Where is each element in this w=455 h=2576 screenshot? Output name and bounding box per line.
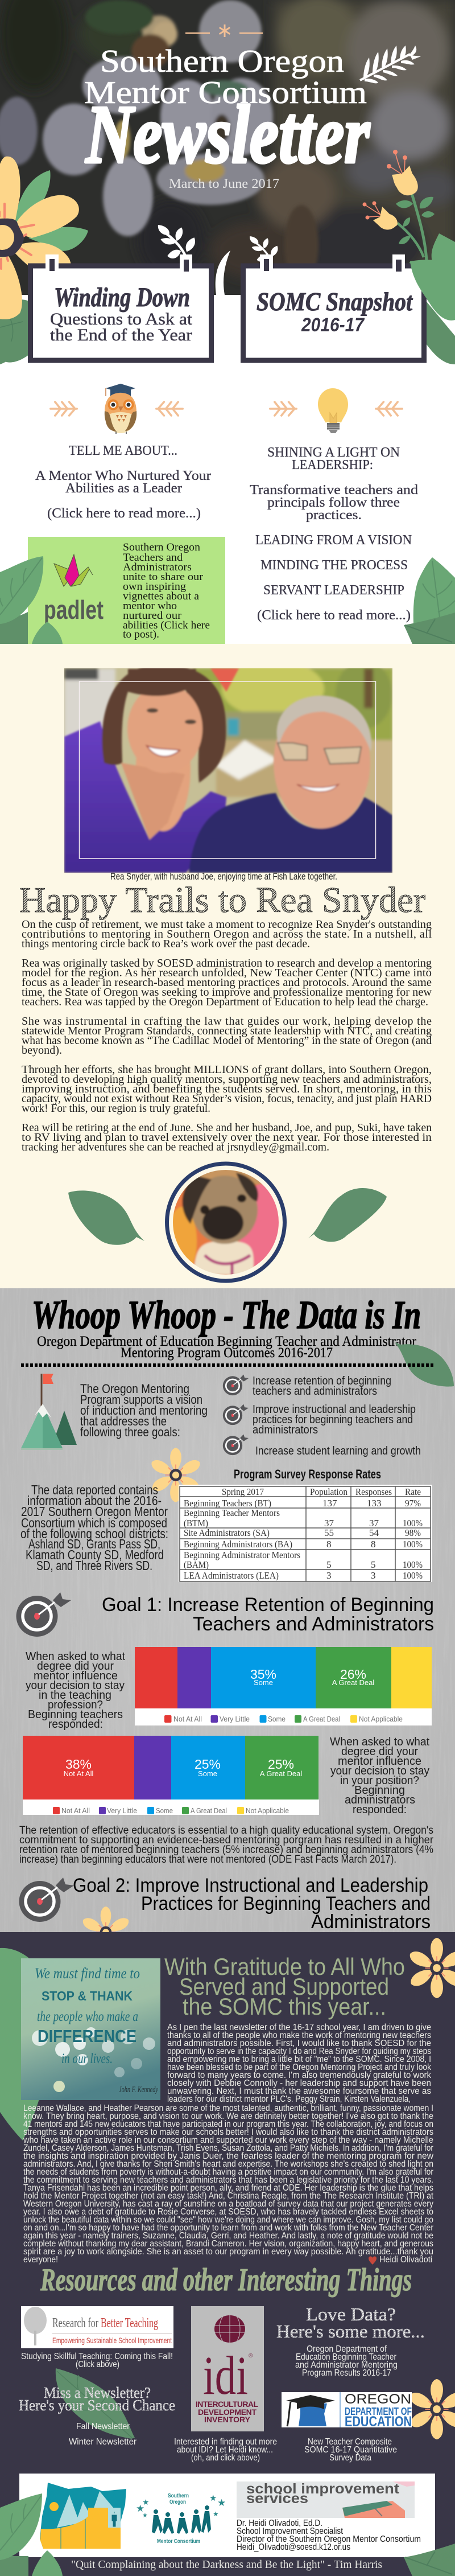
heading: Goal 2: Practices for Beginning Teachers and bbox=[141, 1893, 431, 1914]
heading: Miss a Newsletter: Here's your Second Chance bbox=[19, 2397, 175, 2414]
chart: teachers stacked bar: Not Applicable bbox=[359, 1715, 403, 1723]
text: padlet description: mentor who bbox=[123, 600, 177, 612]
text: Tell me about: A Mentor Who Nurtured Your bbox=[35, 469, 211, 483]
panel: hero photo of white flowers bbox=[0, 0, 455, 295]
logo: Southern Oregon Mentor Consortium: ★ bbox=[209, 2493, 217, 2503]
illustration: leaves left bbox=[0, 556, 63, 644]
logo: Southern Oregon Mentor Consortium bbox=[136, 2493, 226, 2545]
table: program survey response rates: 54 bbox=[369, 1527, 379, 1538]
chart: administrators stacked bar: 25% bbox=[268, 1757, 294, 1772]
table: program survey response rates: Spring 2017 bbox=[222, 1486, 264, 1497]
text: contact details: Director of the Southern Oregon Mentor Consortium bbox=[237, 2534, 421, 2544]
chart: teachers stacked bar bbox=[135, 1647, 432, 1725]
text block: Rea Snyder tribute: model for the region. As her research unfolded, New Teacher Center (NTC) came into bbox=[22, 967, 432, 979]
text: teacher survey question: in the teaching bbox=[39, 1689, 111, 1702]
chart: administrators stacked bar: A Great Deal bbox=[260, 1769, 302, 1778]
table: program survey response rates: Beginning Administrator Mentors bbox=[184, 1550, 300, 1560]
logo: Intercultural Development Inventory bbox=[191, 2306, 264, 2431]
text: consortium districts: 2017 Southern Oregon Mentor bbox=[21, 1504, 168, 1519]
text block: Rea Snyder tribute: teachers. Rea was tapped by the Oregon Department of Education to help lead the charge. bbox=[22, 996, 428, 1008]
text: consortium districts: Ashland SD, Grants Pass SD, bbox=[28, 1536, 160, 1551]
link: new teacher composite survey data: SOMC 16-17 Quantitative bbox=[304, 2445, 397, 2455]
logo: Southern Oregon Mentor Consortium: Oregon bbox=[169, 2499, 186, 2505]
text: padlet description: Teachers and bbox=[123, 552, 183, 564]
text: IDI invitation: (oh, and click above) bbox=[191, 2453, 260, 2463]
heading: Miss a Newsletter: Miss a Newsletter? bbox=[44, 2384, 151, 2401]
text: studying skillful teaching: (Click above) bbox=[76, 2360, 119, 2369]
text: Shining a light on leadership: Transformative teachers and bbox=[250, 483, 418, 498]
heading: With Gratitude: With Gratitude to All Who bbox=[164, 1953, 405, 1980]
text: Shining a light on leadership: LEADERSHIP: bbox=[292, 458, 373, 473]
heading: Love Data: Here's some more... bbox=[276, 2321, 425, 2341]
photo caption: Rea Snyder, with husband Joe, enjoying time at Fish Lake together. bbox=[110, 871, 337, 882]
heading: Love Data bbox=[276, 2304, 425, 2341]
text: consortium districts: The data reported contains bbox=[31, 1482, 158, 1497]
text: studying skillful teaching bbox=[21, 2352, 173, 2369]
text: administrator survey question: Beginning bbox=[354, 1784, 405, 1797]
text block: gratitude message bbox=[23, 2023, 434, 2265]
heading: SOMC Snapshot: SOMC Snapshot bbox=[257, 287, 413, 316]
icons: white sprigs bbox=[158, 225, 278, 295]
text: administrator survey question: in your position? bbox=[340, 1774, 419, 1787]
heading: Happy Trails to Rea Snyder: Happy Trails to Rea Snyder bbox=[19, 880, 425, 920]
text block: Rea Snyder tribute bbox=[22, 918, 432, 1153]
text: padlet description: Administrators bbox=[123, 561, 192, 573]
chart: teachers stacked bar: Some bbox=[254, 1678, 273, 1687]
text: administrator survey question: your decision to stay bbox=[330, 1765, 429, 1777]
title: Mentor Consortium bbox=[84, 75, 367, 110]
image: JFK gratitude quote: DIFFERENCE bbox=[38, 2026, 136, 2046]
illustration: tall leaf left of quote bbox=[0, 1948, 52, 2140]
text block: Rea Snyder tribute: On the cusp of retirement, we must take a moment to recognize Rea Snyder's outstanding bbox=[22, 918, 432, 931]
text: consortium districts: Klamath County SD, Medford bbox=[26, 1547, 164, 1562]
table: program survey response rates: 3 bbox=[371, 1570, 375, 1581]
image: JFK gratitude quote: John F. Kennedy bbox=[119, 2085, 158, 2094]
heading: With Gratitude: the SOMC this year... bbox=[183, 1993, 386, 2020]
chart: teachers stacked bar: A Great Deal bbox=[303, 1715, 340, 1723]
text block: Rea Snyder tribute: improving instruction, and benefiting the students served. In short, mentoring, in this bbox=[22, 1083, 432, 1095]
chart: administrators stacked bar: Not Applicable bbox=[246, 1806, 289, 1815]
link: ODE program results: Program Results 2016-17 bbox=[302, 2368, 391, 2378]
logo: Southern Oregon ESD map bbox=[39, 2482, 127, 2550]
table: program survey response rates: 133 bbox=[367, 1498, 381, 1509]
text block: Rea Snyder tribute: focus as a leader in research-based mentoring practices and protocols. Around the same bbox=[22, 976, 432, 989]
text: padlet description: to post). bbox=[123, 628, 159, 640]
text: contact details: School Improvement Specialist bbox=[237, 2526, 343, 2536]
text block: Rea Snyder tribute: tracking her adventures she can be reached at jrsnydley@gmail.com. bbox=[22, 1141, 329, 1153]
chart: teachers stacked bar: Some bbox=[268, 1715, 286, 1723]
illustration: flower in data section bbox=[149, 1448, 202, 1502]
text block: Rea Snyder tribute: to RV living and plan to travel extensively over the next year. For those interested in bbox=[22, 1131, 432, 1144]
table: program survey response rates: Beginning Administrators (BA) bbox=[184, 1539, 292, 1550]
text: padlet description: nurtured our bbox=[123, 610, 182, 622]
link: new teacher composite survey data bbox=[304, 2437, 397, 2463]
icon: heart bbox=[369, 2256, 377, 2265]
table: program survey response rates: 5 bbox=[326, 1559, 331, 1570]
text: padlet description bbox=[123, 541, 210, 640]
table: program survey response rates: 100% bbox=[403, 1518, 423, 1529]
icon: target 1 bbox=[223, 1374, 249, 1395]
table: program survey response rates: 5 bbox=[371, 1559, 375, 1570]
text block: gratitude message: Heidi Olivadoti bbox=[379, 2255, 432, 2265]
illustration: leaf top right of data section bbox=[395, 1342, 454, 1387]
illustration: center leaf bbox=[56, 2368, 135, 2439]
table: program survey response rates bbox=[179, 1485, 432, 1582]
chart: teachers stacked bar: Very Little bbox=[220, 1715, 250, 1723]
text block: gratitude message: leaders for our district mentor PLC's. Peggy Strain, Kirsten Valenzuela, bbox=[167, 2094, 411, 2104]
text: padlet description: abilities (Click here bbox=[123, 619, 210, 631]
text: studying skillful teaching: Studying Skillful Teaching: Coming this Fall! bbox=[21, 2352, 173, 2361]
text block: Rea Snyder tribute: statewide Mentor Program Standards, connecting state leadership with NTC, and creating bbox=[22, 1025, 432, 1037]
illustration: flower top right of dark section bbox=[407, 1938, 455, 1998]
text: consortium districts: Consortium which is composed bbox=[21, 1515, 167, 1530]
table: program survey response rates: 98% bbox=[405, 1527, 421, 1538]
text: teacher survey question: mentor influence bbox=[34, 1670, 118, 1682]
text: Oregon Mentoring Program vision: Program supports a vision bbox=[80, 1392, 202, 1407]
logo: Oregon Department of Education bbox=[282, 2392, 412, 2430]
heading: Goal 2: Goal 2: Improve Instructional and Leadership bbox=[73, 1875, 428, 1896]
text: administrator survey question: degree did your bbox=[341, 1745, 418, 1758]
logo: Intercultural Development Inventory: ® bbox=[249, 2353, 253, 2359]
chart: administrators stacked bar: Very Little bbox=[107, 1806, 137, 1815]
text: contact details: Heidi_Olivadoti@soesd.k12.or.us bbox=[237, 2542, 350, 2552]
text block: gratitude message: closely with Debbie Connolly - her leadership and support have been bbox=[167, 2078, 431, 2088]
heading: Miss a Newsletter bbox=[19, 2384, 175, 2414]
text block: retention summary bbox=[19, 1825, 434, 1866]
text: administrator survey question bbox=[330, 1736, 429, 1816]
image: JFK gratitude quote: STOP & THANK bbox=[42, 1989, 133, 2003]
text block: retention summary: increase) than beginning educators that were not mentored (ODE Fast Facts March 2017). bbox=[19, 1854, 396, 1866]
chart: teachers stacked bar: A Great Deal bbox=[332, 1678, 374, 1687]
text block: Rea Snyder tribute: what has become known as “The Cadillac Model of Mentoring” in the state of Oregon (and bbox=[22, 1034, 432, 1047]
chart: administrators stacked bar bbox=[23, 1736, 319, 1815]
subheading: Questions to Ask at bbox=[50, 310, 193, 328]
link: ODE program results bbox=[295, 2344, 398, 2378]
table: program survey response rates: 100% bbox=[403, 1559, 423, 1570]
chart: teachers stacked bar: Not At All bbox=[173, 1715, 202, 1723]
logo: Southern Oregon Mentor Consortium: Mentor Consortium bbox=[157, 2538, 200, 2545]
text: Shining a light on leadership: SHINING A LIGHT ON bbox=[267, 445, 400, 460]
text: contact details: Dr. Heidi Olivadoti, Ed.D. bbox=[237, 2519, 322, 2528]
text: contact details bbox=[237, 2519, 421, 2552]
text: IDI invitation bbox=[174, 2437, 277, 2463]
links: past newsletters: Winter Newsletter bbox=[69, 2437, 137, 2447]
title: Southern Oregon bbox=[100, 44, 344, 79]
logo: Oregon Department of Education: DEPARTMENT OF bbox=[345, 2406, 412, 2417]
logo: Intercultural Development Inventory: INTERCULTURAL bbox=[196, 2400, 258, 2409]
icon: goal 2 target bbox=[19, 1877, 74, 1922]
text block: gratitude message: the insights and inspiration provided by Janis Duer, the fearless leader of the mentoring program for new bbox=[23, 2151, 434, 2161]
heading: Goal 2: Administrators bbox=[311, 1911, 431, 1933]
logo: Intercultural Development Inventory: INVENTORY bbox=[204, 2415, 251, 2424]
text: teacher survey question: responded: bbox=[48, 1718, 103, 1731]
logo: Southern Oregon Mentor Consortium: ★ bbox=[217, 2497, 226, 2508]
subheading bbox=[50, 310, 193, 344]
logo: Intercultural Development Inventory: idi bbox=[203, 2345, 248, 2406]
heading: year: 2016-17 bbox=[301, 314, 365, 336]
text block: Rea Snyder tribute: things mentoring circle back to Rea’s work over the past decade. bbox=[22, 938, 310, 950]
link: ODE program results: and Administrator Mentoring bbox=[295, 2360, 398, 2370]
text: teacher survey question: degree did your bbox=[37, 1660, 114, 1673]
text block: Rea Snyder tribute: devoted to developing high quality mentors, supporting new teachers and administrators, bbox=[22, 1073, 432, 1086]
logo: Southern Oregon Mentor Consortium: ★ bbox=[213, 2510, 219, 2518]
chart: administrators stacked bar: A Great Deal bbox=[191, 1806, 227, 1815]
banner: school improvement services bbox=[237, 2481, 415, 2518]
logo: Research for Better Teaching bbox=[21, 2306, 173, 2348]
logo: Southern Oregon Mentor Consortium: ★ bbox=[136, 2503, 144, 2514]
subheading: the End of the Year bbox=[50, 326, 192, 344]
icon: goal 1 target bbox=[16, 1592, 71, 1637]
text block: Rea Snyder tribute: Rea was originally tasked by SOESD administration to research and develop a mentoring bbox=[22, 957, 432, 969]
text block: Rea Snyder tribute: beyond). bbox=[22, 1044, 62, 1057]
text block: Rea Snyder tribute: She was instrumental in crafting the law that guides our work, helping develop the bbox=[22, 1015, 432, 1028]
table: program survey response rates: 37 bbox=[324, 1518, 334, 1529]
heading: Goal 1 bbox=[102, 1594, 434, 1635]
links: past newsletters: Fall Newsletter bbox=[76, 2422, 130, 2431]
table: program survey response rates: 97% bbox=[405, 1498, 421, 1509]
text block: gratitude message: thanks to all of the people who make the work of mentoring new teachers bbox=[167, 2031, 431, 2040]
date: March to June 2017 bbox=[169, 176, 279, 191]
text: administrator survey question: mentor influence bbox=[338, 1755, 421, 1768]
text: Oregon Mentoring Program vision: following three goals: bbox=[80, 1425, 180, 1439]
image: JFK gratitude quote: in our lives. bbox=[61, 2051, 113, 2066]
illustration: large yellow flower with leaves bbox=[0, 157, 88, 363]
goal text: Increase retention of beginning bbox=[253, 1375, 391, 1387]
text block: gratitude message: strengths and opportunities serves to make our schools better! I would also like to thank the district administrators bbox=[23, 2127, 433, 2137]
heading: Goal 2 bbox=[73, 1875, 431, 1933]
link: new teacher composite survey data: New Teacher Composite bbox=[308, 2437, 392, 2447]
image: JFK gratitude quote: the people who make a bbox=[37, 2009, 138, 2024]
icon: target 2 bbox=[223, 1404, 249, 1425]
text block: Rea Snyder tribute: Rea will be retiring at the end of June. She and her husband, Joe, and pup, Suki, have taken bbox=[22, 1121, 432, 1134]
banner: school improvement services: services bbox=[246, 2491, 308, 2507]
heading: Goal 1: Teachers and Administrators bbox=[193, 1613, 434, 1635]
text block: gratitude message: have been blessed to be part of the Oregon Mentoring Project and truly look bbox=[167, 2063, 431, 2072]
chart: administrators stacked bar: 38% bbox=[65, 1757, 92, 1772]
table: program survey response rates: Beginning Teachers (BT) bbox=[184, 1498, 271, 1509]
text: padlet description: unite to share our bbox=[123, 571, 204, 583]
leaf over card corner bbox=[410, 260, 455, 321]
image: JFK gratitude quote bbox=[21, 1958, 160, 2100]
table: program survey response rates: Site Administrators (SA) bbox=[184, 1527, 270, 1538]
text block: gratitude message: and empowering me to bring a little bit of "me" to the SOMC. Since 2008, I bbox=[167, 2055, 431, 2064]
text: padlet description: Southern Oregon bbox=[123, 541, 201, 553]
chart: administrators stacked bar: Not At All bbox=[64, 1769, 93, 1778]
text: IDI invitation: Interested in finding out more bbox=[174, 2437, 277, 2447]
link: new teacher composite survey data: Survey Data bbox=[329, 2453, 371, 2463]
subheading: ODE program outcomes: Oregon Department of Education Beginning Teacher and Administrator bbox=[37, 1334, 417, 1349]
icon: light bulb and arrows bbox=[270, 388, 402, 433]
table title: Program Survey Response Rates bbox=[234, 1467, 381, 1481]
text: Shining a light on leadership: LEADING FROM A VISION bbox=[255, 533, 412, 548]
text: IDI invitation: about IDI? Let Heidi know... bbox=[177, 2445, 273, 2455]
goal text: teachers and administrators bbox=[253, 1385, 377, 1398]
image: JFK gratitude quote: We must find time to bbox=[35, 1965, 140, 1982]
heading: With Gratitude bbox=[164, 1953, 405, 2020]
chart: administrators stacked bar: Some bbox=[156, 1806, 173, 1815]
table: program survey response rates: (BAM) bbox=[184, 1559, 209, 1570]
text: consortium districts: information about the 2016- bbox=[27, 1493, 162, 1508]
logo: Intercultural Development Inventory: DEVELOPMENT bbox=[198, 2407, 257, 2417]
text: padlet description: vignettes about a bbox=[123, 590, 200, 602]
table: program survey response rates: 100% bbox=[403, 1570, 423, 1581]
icon: target 3 bbox=[223, 1434, 249, 1455]
logo: Oregon Department of Education: OREGON bbox=[345, 2392, 411, 2407]
text: consortium districts bbox=[20, 1482, 168, 1573]
illustration: leaf left of pug bbox=[68, 1190, 144, 1245]
text block: gratitude message: and administrators possible. First, I would like to thank SOESD for the bbox=[167, 2039, 431, 2048]
photo: Suki the pug bbox=[167, 1164, 284, 1281]
subheading: ODE program outcomes: Mentoring Program Outcomes 2016-2017 bbox=[121, 1345, 333, 1361]
panel: Winding Down card bbox=[31, 254, 212, 360]
text: Oregon Mentoring Program vision bbox=[80, 1382, 208, 1439]
text: Shining a light on leadership: principals follow three bbox=[267, 495, 400, 510]
table: program survey response rates: 137 bbox=[322, 1498, 337, 1509]
goal text: Increase student learning and growth bbox=[255, 1445, 421, 1457]
icon: padlet crane bbox=[54, 554, 93, 586]
text: teacher survey question: your decision to stay bbox=[26, 1679, 125, 1692]
text: administrator survey question: administrators bbox=[345, 1794, 415, 1806]
table: program survey response rates: Rate bbox=[405, 1486, 421, 1497]
goal text: practices for beginning teachers and bbox=[253, 1414, 413, 1426]
table: program survey response rates: 8 bbox=[371, 1539, 375, 1550]
illustration: bottom-right leaf bbox=[404, 2544, 455, 2576]
heading: Love Data: Love Data? bbox=[306, 2304, 396, 2324]
goal text bbox=[253, 1375, 421, 1457]
text: Shining a light on leadership: MINDING THE PROCESS bbox=[260, 558, 408, 573]
table: program survey response rates: 3 bbox=[326, 1570, 331, 1581]
text block: gratitude message: everyone! bbox=[23, 2255, 58, 2265]
icon: mountains with flag bbox=[21, 1374, 77, 1450]
footer quote: "Quit Complaining about the Darkness and Be the Light" - Tim Harris bbox=[71, 2558, 382, 2571]
text: consortium districts: of the following school districts: bbox=[20, 1526, 168, 1541]
ornament: star divider bbox=[185, 24, 263, 37]
text block: retention summary: commitment to supporting an evidence-based mentoring porgram has resulted in a higher bbox=[19, 1834, 434, 1846]
goal text: administrators bbox=[253, 1424, 318, 1436]
table: program survey response rates: Beginning Teacher Mentors bbox=[184, 1507, 280, 1518]
text block: Rea Snyder tribute: contributions to mentoring in Southern Oregon and across the state. In a nutshell, all bbox=[22, 928, 432, 940]
panel: padlet callout bbox=[28, 537, 225, 644]
text block: Rea Snyder tribute: work! For this, our region is truly grateful. bbox=[22, 1102, 210, 1115]
text: administrator survey question: When asked to what bbox=[330, 1736, 429, 1748]
table: program survey response rates: 37 bbox=[369, 1518, 379, 1529]
title: Newsletter script: Newsletter bbox=[85, 88, 370, 180]
illustration: leaf right of pug bbox=[306, 1188, 387, 1242]
logo: Southern Oregon Mentor Consortium: ★ bbox=[142, 2512, 148, 2519]
chart: administrators stacked bar: Some bbox=[198, 1769, 217, 1778]
text block: gratitude message: forward to many years to come. I'm also tremendously grateful to work bbox=[167, 2070, 431, 2080]
text: Tell me about: Abilities as a Leader bbox=[65, 481, 182, 496]
banner: school improvement services: school improvement bbox=[246, 2481, 400, 2497]
text block: gratitude message: who have taken an active role in our consortium and supported our work every step of the way - namely Michelle bbox=[23, 2135, 433, 2145]
panel: footer contact bbox=[19, 2474, 435, 2557]
text: teacher survey question bbox=[26, 1650, 125, 1731]
text: Shining a light on leadership: (Click here to read more...) bbox=[257, 608, 411, 623]
text block: Rea Snyder tribute: Through her efforts, she has brought MILLIONS of grant dollars, into Southern Oregon, bbox=[22, 1063, 432, 1076]
text block: gratitude message: As I pen the last newsletter of the 16-17 school year, I am driven to give bbox=[167, 2023, 431, 2032]
illustration: big leaves on right bbox=[0, 233, 455, 364]
table: program survey response rates: 55 bbox=[324, 1527, 334, 1538]
chart: administrators stacked bar: 25% bbox=[195, 1757, 221, 1772]
table: program survey response rates: (BTM) bbox=[184, 1518, 208, 1529]
illustration: tulips and stem bbox=[363, 150, 435, 261]
logo: Oregon Department of Education: EDUCATION bbox=[345, 2414, 412, 2430]
text block: gratitude message: spirit are a joy to work alongside. She is an asset to our program in every way possible. Ah gratitude...thank you bbox=[23, 2247, 433, 2257]
logo text: padlet: padlet bbox=[44, 595, 104, 625]
text: Shining a light on leadership: practices. bbox=[306, 508, 362, 523]
heading: Goal 1: Goal 1: Increase Retention of Beginning bbox=[102, 1594, 434, 1616]
illustration: flower peeking over dark section bbox=[83, 1907, 129, 1932]
list: three program goals bbox=[223, 1374, 421, 1457]
title bbox=[84, 44, 367, 110]
text: consortium districts: SD, and Three Rivers SD. bbox=[36, 1558, 152, 1573]
text: Tell me about bbox=[35, 443, 211, 521]
text: Shining a light on leadership: SERVANT LEADERSHIP bbox=[263, 583, 404, 598]
link: ODE program results: Oregon Department of bbox=[307, 2344, 387, 2354]
table: program survey response rates: 100% bbox=[403, 1539, 423, 1550]
icon: owl with graduation cap and arrows bbox=[51, 384, 183, 434]
text: Oregon Mentoring Program vision: The Oregon Mentoring bbox=[80, 1382, 189, 1396]
text: teacher survey question: profession? bbox=[48, 1699, 103, 1711]
text: Oregon Mentoring Program vision: that addresses the bbox=[80, 1414, 167, 1428]
heading: Winding Down: Winding Down bbox=[54, 282, 190, 313]
chart: administrators stacked bar: Not At All bbox=[61, 1806, 90, 1815]
heading: With Gratitude: Served and Supported bbox=[179, 1973, 389, 2000]
text block: Rea Snyder tribute: capacity, would not exist without Rea Snyder’s vision, focus, tenacity, and just plain HARD bbox=[22, 1092, 432, 1105]
logo: Southern Oregon Mentor Consortium: ★ bbox=[142, 2497, 150, 2507]
subheading: ODE program outcomes bbox=[37, 1334, 417, 1361]
text: teacher survey question: Beginning teachers bbox=[28, 1708, 123, 1721]
text: administrator survey question: responded: bbox=[353, 1803, 407, 1816]
goal text: Improve instructional and leadership bbox=[253, 1403, 416, 1416]
text: Shining a light on leadership bbox=[250, 445, 418, 623]
logo: Southern Oregon Mentor Consortium: Southern bbox=[168, 2493, 189, 2499]
logo: Research for Better Teaching: Empowering Sustainable School Improvement bbox=[52, 2336, 172, 2345]
text block: gratitude message: unwavering. Next, I must thank the awesome foursome that serve as bbox=[167, 2086, 431, 2096]
chart: teachers stacked bar: 26% bbox=[340, 1667, 366, 1682]
illustration: bottom-left leaves bbox=[0, 2493, 63, 2576]
photo: Rea Snyder and husband Joe bbox=[64, 660, 392, 873]
table: program survey response rates: 8 bbox=[326, 1539, 331, 1550]
links: past newsletters bbox=[69, 2422, 137, 2447]
illustration: flower lower right bbox=[407, 2379, 455, 2439]
text: padlet description: own inspiring bbox=[123, 581, 187, 593]
logo: Research for Better Teaching: Research for Better Teaching bbox=[52, 2316, 158, 2331]
text: Oregon Mentoring Program vision: of induction and mentoring bbox=[80, 1403, 208, 1418]
text: Tell me about: TELL ME ABOUT... bbox=[69, 443, 177, 458]
chart: teachers stacked bar: 35% bbox=[250, 1667, 276, 1682]
illustration: leaves right bbox=[404, 557, 455, 644]
link: ODE program results: Education Beginning Teacher bbox=[296, 2352, 397, 2362]
table: program survey response rates: Responses bbox=[355, 1486, 392, 1497]
text: teacher survey question: When asked to what bbox=[26, 1650, 125, 1663]
table: program survey response rates: Population bbox=[310, 1486, 348, 1497]
text block: Rea Snyder tribute: time, the State of Oregon was seeking to improve and professionalize mentoring for new bbox=[22, 986, 432, 999]
icon: white fern bbox=[360, 46, 421, 83]
table: program survey response rates: LEA Administrators (LEA) bbox=[184, 1570, 279, 1581]
panel: SOMC Snapshot card bbox=[243, 254, 424, 360]
text: Tell me about: (Click here to read more...) bbox=[47, 506, 201, 521]
